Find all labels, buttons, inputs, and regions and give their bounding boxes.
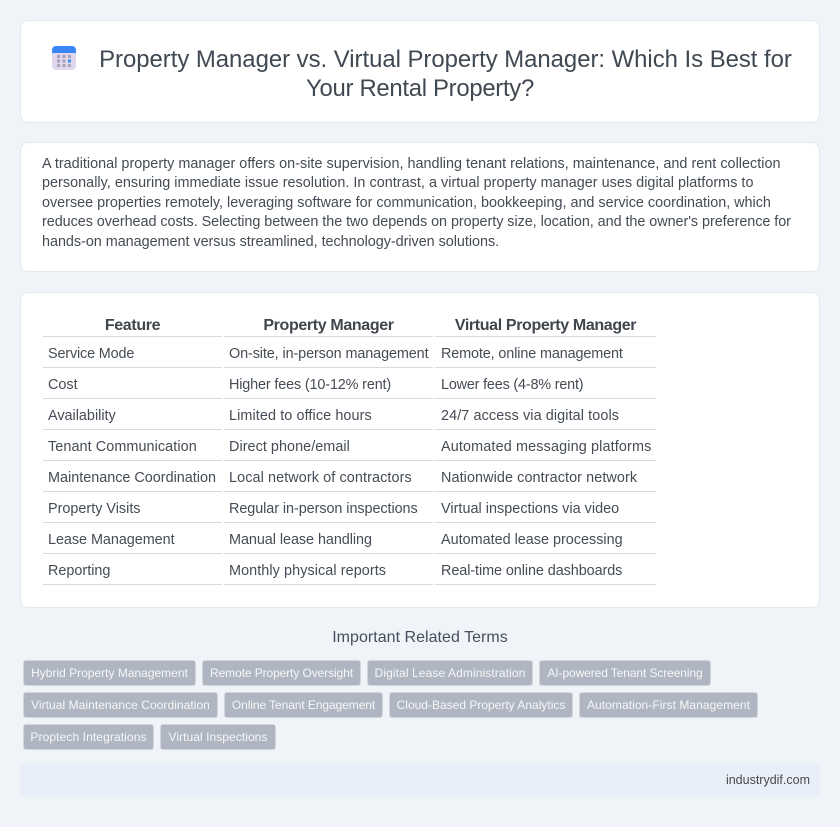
- comparison table: Property Visits: [48, 501, 141, 517]
- related terms tags: Digital Lease Administration: [375, 666, 525, 680]
- comparison table: Service Mode: [48, 346, 134, 362]
- comparison table: Regular in-person inspections: [229, 501, 418, 517]
- title: Property Manager vs. Virtual Property Manager: Which Is Best for: [99, 46, 792, 73]
- comparison table: Nationwide contractor network: [441, 470, 637, 486]
- comparison table: Tenant Communication: [48, 439, 197, 455]
- related terms tags: Online Tenant Engagement: [232, 698, 375, 712]
- comparison table: Lower fees (4-8% rent): [441, 377, 583, 393]
- text block: introduction: personally, ensuring immediate issue resolution. In contrast, a virtual property manager uses digital platforms to: [42, 175, 754, 191]
- related terms tags: Hybrid Property Management: [31, 666, 188, 680]
- table header: property manager: Property Manager: [263, 317, 394, 334]
- related terms tags: AI-powered Tenant Screening: [547, 666, 703, 680]
- text block: introduction: [42, 156, 791, 250]
- related terms tags: Automation-First Management: [587, 698, 750, 712]
- text block: introduction: reduces overhead costs. Selecting between the two depends on property size, location, and the owner's preference for: [42, 214, 791, 230]
- comparison table: Limited to office hours: [229, 408, 372, 424]
- comparison table: Reporting: [48, 563, 110, 579]
- comparison table: On-site, in-person management: [229, 346, 428, 362]
- title: [99, 46, 792, 102]
- comparison table: [43, 317, 656, 585]
- related terms tags: Remote Property Oversight: [210, 666, 353, 680]
- comparison table: Automated lease processing: [441, 532, 623, 548]
- panel: header: [20, 20, 820, 123]
- text block: introduction: oversee properties remotely, leveraging software for communication, bookkeeping, and service coordination, which: [42, 195, 771, 211]
- related terms tags: Proptech Integrations: [30, 730, 147, 744]
- comparison table: Availability: [48, 408, 116, 424]
- footer: [20, 763, 820, 797]
- related terms tags: Cloud-Based Property Analytics: [397, 698, 565, 712]
- table header: virtual property manager: Virtual Property Manager: [455, 317, 636, 334]
- footer: source: industrydif.com: [726, 773, 810, 787]
- comparison table: Manual lease handling: [229, 532, 372, 548]
- related terms tags: Virtual Inspections: [168, 730, 267, 744]
- icon: calendar: [52, 46, 76, 70]
- comparison table: Higher fees (10-12% rent): [229, 377, 391, 393]
- comparison table: Virtual inspections via video: [441, 501, 619, 517]
- comparison table: Local network of contractors: [229, 470, 412, 486]
- title: Your Rental Property?: [306, 75, 534, 102]
- text block: introduction: hands-on management versus streamlined, technology-driven solutions.: [42, 234, 499, 250]
- related terms tags: Virtual Maintenance Coordination: [31, 698, 210, 712]
- comparison table: Automated messaging platforms: [441, 439, 651, 455]
- comparison table: Lease Management: [48, 532, 175, 548]
- table header: feature: Feature: [105, 317, 160, 334]
- comparison table: Monthly physical reports: [229, 563, 386, 579]
- text block: introduction: A traditional property manager offers on-site supervision, handling tenant relations, maintenance, and rent collection: [42, 156, 780, 172]
- comparison table: Cost: [48, 377, 78, 393]
- panel: comparison table: [20, 292, 820, 608]
- comparison table: Maintenance Coordination: [48, 470, 216, 486]
- comparison table: Remote, online management: [441, 346, 623, 362]
- comparison table: Real-time online dashboards: [441, 563, 622, 579]
- comparison table: Direct phone/email: [229, 439, 350, 455]
- comparison table: 24/7 access via digital tools: [441, 408, 619, 424]
- heading: related terms: Important Related Terms: [332, 629, 508, 646]
- panel: introduction: [20, 142, 820, 272]
